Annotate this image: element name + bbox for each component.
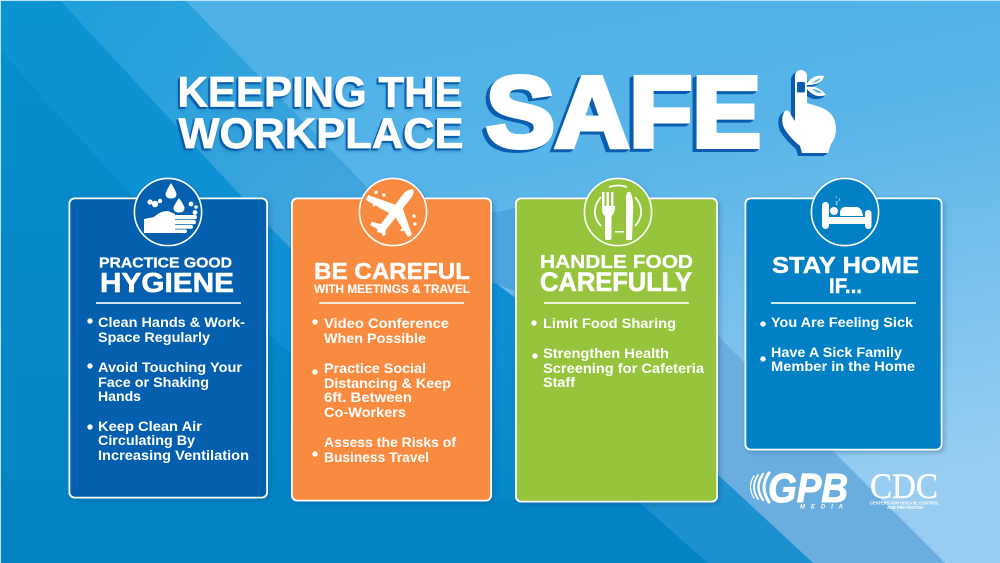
icon: finger with tied bow bbox=[782, 70, 836, 153]
logo: GPB Media: MEDIA bbox=[800, 504, 843, 510]
heading: BE CAREFUL bbox=[314, 258, 470, 284]
heading bbox=[772, 252, 919, 298]
panel: handle food carefully bbox=[515, 178, 718, 502]
panel: be careful bbox=[291, 178, 492, 502]
icon: person in bed: z bbox=[836, 195, 838, 199]
bullet list: Space Regularly bbox=[98, 329, 210, 345]
heading: IF... bbox=[829, 275, 862, 298]
bullet list: Limit Food Sharing bbox=[543, 315, 676, 331]
bullet list bbox=[312, 315, 456, 465]
card shape bbox=[515, 178, 718, 502]
logo: CDC: AND PREVENTION bbox=[887, 505, 923, 510]
heading: HYGIENE bbox=[100, 267, 234, 298]
icon: plate, fork and knife bbox=[595, 186, 641, 240]
bullet list: Clean Hands & Work- bbox=[98, 314, 245, 330]
heading bbox=[540, 251, 693, 297]
title: keeping the workplace: KEEPING THE bbox=[178, 68, 462, 116]
bullet list: Assess the Risks of bbox=[324, 434, 456, 450]
card shape bbox=[291, 178, 492, 502]
heading bbox=[99, 254, 234, 298]
heading bbox=[314, 258, 470, 296]
heading: PRACTICE GOOD bbox=[99, 254, 232, 272]
bullet list: 6ft. Between bbox=[324, 389, 412, 405]
bullet list bbox=[531, 315, 704, 390]
bullet list: Video Conference bbox=[324, 315, 449, 331]
card shape bbox=[68, 178, 268, 498]
panel: practice good hygiene bbox=[68, 178, 268, 498]
bullet list: You Are Feeling Sick bbox=[771, 314, 913, 330]
bullet list: Screening for Cafeteria bbox=[543, 360, 704, 376]
icon: airplane bbox=[366, 189, 417, 237]
heading: WITH MEETINGS & TRAVEL bbox=[314, 282, 470, 296]
bullet list: Business Travel bbox=[324, 449, 429, 465]
bullet list: Practice Social bbox=[324, 360, 426, 376]
bullet list: Member in the Home bbox=[771, 358, 915, 374]
bullet list: Have A Sick Family bbox=[771, 344, 902, 360]
bullet list: When Possible bbox=[324, 330, 426, 346]
icon: person in bed bbox=[822, 195, 872, 229]
icon: person in bed: z bbox=[836, 200, 838, 206]
bullet list bbox=[87, 314, 249, 463]
icon: washing hands bbox=[144, 183, 198, 233]
bullet list: Face or Shaking bbox=[98, 374, 209, 390]
logo: CDC: CDC bbox=[870, 466, 938, 506]
logo: CDC: CENTERS FOR DISEASE CONTROL bbox=[870, 500, 939, 506]
heading: HANDLE FOOD bbox=[540, 251, 693, 272]
bullet list: Staff bbox=[543, 374, 575, 390]
bullet list: Hands bbox=[98, 388, 141, 404]
title: keeping the workplace bbox=[178, 68, 464, 158]
bullet list: Circulating By bbox=[98, 432, 195, 448]
bullet list: Co-Workers bbox=[324, 404, 406, 420]
panel: stay home if bbox=[744, 178, 942, 450]
logo: GPB Media: GPB bbox=[768, 465, 848, 511]
heading: STAY HOME bbox=[772, 252, 919, 278]
bullet list: Keep Clean Air bbox=[98, 418, 203, 434]
bullet list: Increasing Ventilation bbox=[98, 447, 249, 463]
card shape bbox=[744, 178, 942, 450]
bullet list: Distancing & Keep bbox=[324, 375, 451, 391]
bullet list bbox=[760, 314, 915, 374]
bullet list: Strengthen Health bbox=[543, 345, 669, 361]
title: keeping the workplace: WORKPLACE bbox=[178, 110, 464, 158]
heading: CAREFULLY bbox=[540, 267, 692, 297]
bullet list: Avoid Touching Your bbox=[98, 359, 243, 375]
icon: person in bed: z bbox=[838, 196, 840, 202]
title: safe: SAFE bbox=[486, 56, 761, 168]
